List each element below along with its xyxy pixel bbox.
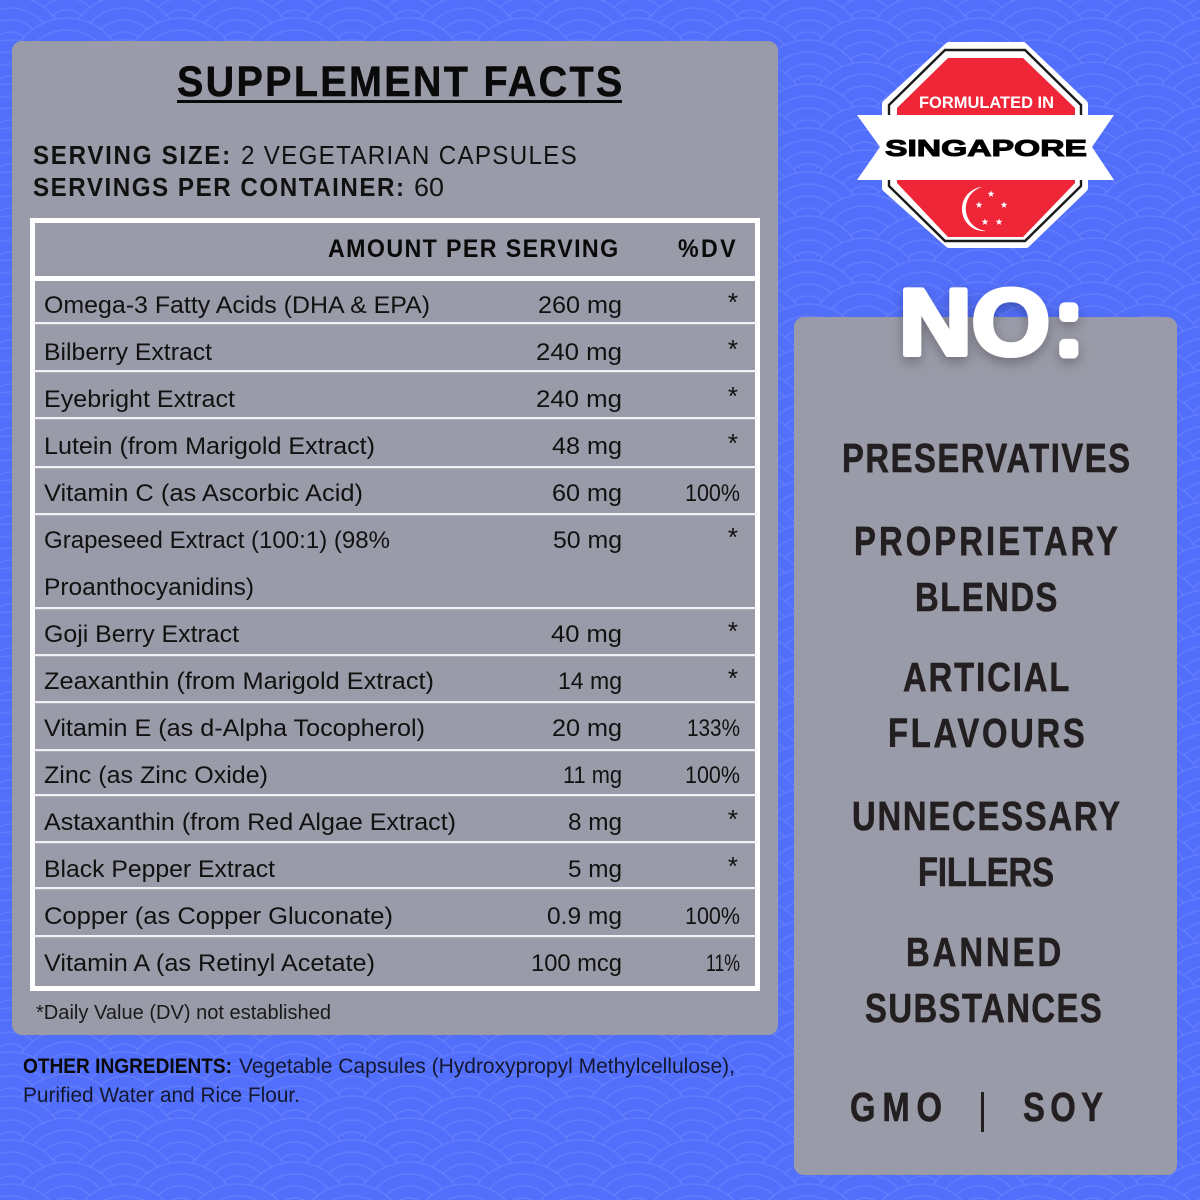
row: zinc: 100% (685, 762, 740, 789)
item: unnecessary fillers: FILLERS (918, 848, 1054, 895)
row: zeaxanthin: * (728, 663, 738, 693)
row: lutein: 48 mg (552, 433, 622, 460)
servings per container: SERVINGS PER CONTAINER: (33, 173, 404, 202)
icon: crescent and stars (962, 187, 1007, 231)
other ingredients: OTHER INGREDIENTS: (23, 1055, 232, 1078)
row: grapeseed: Proanthocyanidins) (44, 574, 254, 601)
nutrition table (32, 220, 758, 988)
panel: supplement facts (12, 41, 778, 1035)
item: articial flavours: FLAVOURS (888, 709, 1085, 756)
item: banned substances (865, 928, 1102, 1031)
row: black pepper: * (728, 851, 738, 881)
item: proprietary blends (854, 517, 1118, 620)
item: gmo and soy: SOY (1023, 1083, 1103, 1130)
table header: AMOUNT PER SERVING (328, 235, 618, 263)
row: astaxanthin (44, 804, 738, 836)
row: omega-3 (44, 287, 738, 319)
row: bilberry (44, 334, 738, 366)
serving size: SERVING SIZE: (33, 141, 230, 170)
badge: formulated in singapore (857, 46, 1114, 244)
row: eyebright (44, 381, 738, 413)
table header: %DV (678, 235, 736, 263)
item: banned substances: SUBSTANCES (865, 984, 1102, 1031)
other ingredients: Vegetable Capsules (Hydroxypropyl Methylcellulose), (239, 1055, 735, 1078)
row: lutein: Lutein (from Marigold Extract) (44, 433, 375, 460)
row: copper: 100% (685, 903, 740, 930)
row: zeaxanthin: Zeaxanthin (from Marigold Extract) (44, 668, 434, 695)
row: goji: * (728, 616, 738, 646)
row: astaxanthin: * (728, 804, 738, 834)
row: omega-3: 260 mg (538, 292, 622, 319)
row: copper: Copper (as Copper Gluconate) (44, 903, 393, 930)
row: lutein: * (728, 428, 738, 458)
row: astaxanthin: Astaxanthin (from Red Algae Extract) (44, 809, 456, 836)
row: lutein (44, 428, 738, 460)
other ingredients: Purified Water and Rice Flour. (23, 1084, 300, 1107)
row: vitamin a (44, 950, 740, 977)
item: preservatives: PRESERVATIVES (842, 434, 1130, 481)
row: omega-3: Omega-3 Fatty Acids (DHA & EPA) (44, 292, 430, 319)
row: black pepper (44, 851, 738, 883)
row: copper (44, 903, 740, 930)
row: zeaxanthin (44, 663, 738, 695)
row: astaxanthin: 8 mg (568, 809, 622, 836)
row: goji (44, 616, 738, 648)
panel: no list (794, 270, 1177, 1175)
serving size (33, 141, 577, 170)
row: vitamin c: 100% (685, 480, 740, 507)
row: black pepper: Black Pepper Extract (44, 856, 275, 883)
item: proprietary blends: BLENDS (915, 573, 1057, 620)
heading: no: : (1057, 277, 1081, 372)
row: bilberry: 240 mg (536, 339, 622, 366)
ribbon (857, 115, 1114, 180)
row: goji: 40 mg (551, 621, 622, 648)
row: grapeseed: * (728, 522, 738, 552)
other ingredients (23, 1055, 735, 1107)
heading: no: NO (899, 270, 1050, 374)
item: banned substances: BANNED (906, 928, 1061, 975)
item: gmo and soy (850, 1083, 1103, 1132)
item: articial flavours: ARTICIAL (903, 653, 1069, 700)
row: omega-3: * (728, 287, 738, 317)
row: goji: Goji Berry Extract (44, 621, 239, 648)
title: SUPPLEMENT FACTS (177, 57, 622, 105)
serving size: 2 VEGETARIAN CAPSULES (241, 141, 577, 170)
item: gmo and soy: GMO (850, 1083, 942, 1130)
row: copper: 0.9 mg (547, 903, 622, 930)
row: vitamin e: 20 mg (552, 715, 622, 742)
label: formulated in: FORMULATED IN (919, 94, 1054, 112)
item: articial flavours (888, 653, 1085, 756)
row: zinc: 11 mg (563, 762, 622, 789)
row: vitamin c: Vitamin C (as Ascorbic Acid) (44, 480, 363, 507)
row: zinc (44, 762, 740, 789)
item: unnecessary fillers: UNNECESSARY (852, 792, 1120, 839)
row: zeaxanthin: 14 mg (558, 668, 622, 695)
row: vitamin c: 60 mg (552, 480, 622, 507)
item: unnecessary fillers (852, 792, 1120, 895)
footnote: *Daily Value (DV) not established (36, 1002, 331, 1024)
row: bilberry: Bilberry Extract (44, 339, 212, 366)
row: vitamin a: 11% (706, 950, 740, 977)
row: grapeseed: Grapeseed Extract (100:1) (98% (44, 527, 390, 554)
row: vitamin e: 133% (687, 715, 740, 742)
row: vitamin a: Vitamin A (as Retinyl Acetate) (44, 950, 375, 977)
row: eyebright: * (728, 381, 738, 411)
row: vitamin a: 100 mcg (531, 950, 622, 977)
row: vitamin e (44, 715, 740, 742)
label: singapore: SINGAPORE (885, 135, 1087, 161)
row: black pepper: 5 mg (568, 856, 622, 883)
row: bilberry: * (728, 334, 738, 364)
row: grapeseed (44, 522, 738, 601)
row: vitamin e: Vitamin E (as d-Alpha Tocopherol) (44, 715, 425, 742)
item: proprietary blends: PROPRIETARY (854, 517, 1118, 564)
servings per container: 60 (414, 172, 444, 202)
row: eyebright: Eyebright Extract (44, 386, 235, 413)
row: eyebright: 240 mg (536, 386, 622, 413)
row: grapeseed: 50 mg (553, 527, 622, 554)
row: vitamin c (44, 480, 740, 507)
row: zinc: Zinc (as Zinc Oxide) (44, 762, 268, 789)
